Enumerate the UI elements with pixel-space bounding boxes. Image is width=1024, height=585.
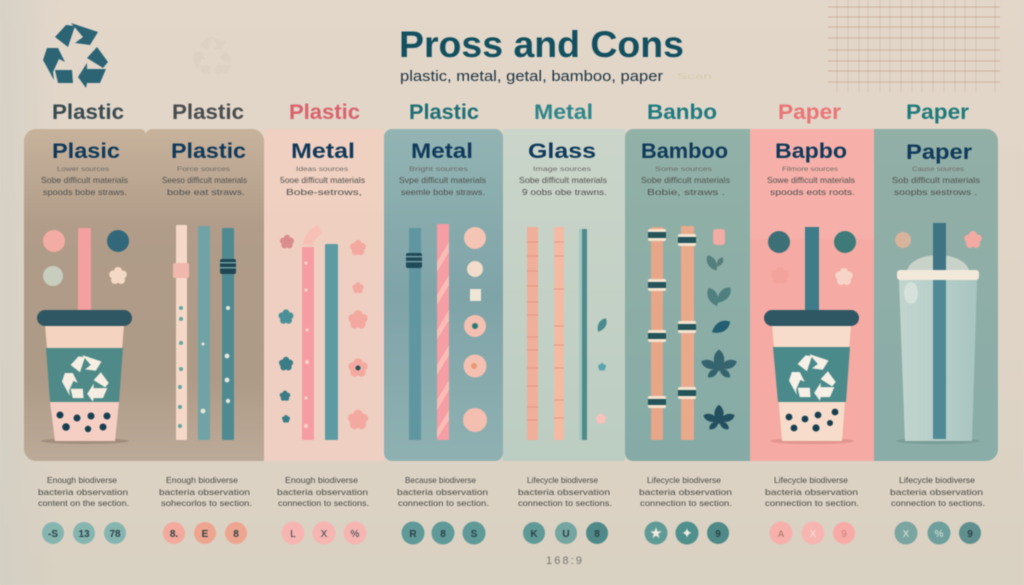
column labels: Plastic bbox=[172, 101, 244, 124]
panel: plasic bbox=[24, 129, 146, 461]
icon row: plastic two: 8. bbox=[170, 529, 178, 540]
panel: metal, teal: seemle bobe straws. bbox=[401, 187, 485, 197]
panel: metal, pale pink: Bobe-setrows, bbox=[286, 187, 362, 197]
straws: teal and striped pink bbox=[406, 224, 449, 440]
panel: glass: Sobe difficult materials bbox=[519, 175, 607, 185]
icons: blossoms bbox=[895, 231, 982, 248]
panel: bapbo, coral: Filmore sources bbox=[782, 166, 839, 173]
icon row: metal: % bbox=[351, 529, 360, 540]
subtitle: plastic, metal, getal, bamboo, paper bbox=[400, 68, 663, 85]
bottom text: metal bbox=[277, 475, 369, 508]
icon row: paper bbox=[894, 522, 981, 544]
panel: plasic: Sobe difficult materials bbox=[41, 175, 128, 185]
footer ratio label: 168:9 bbox=[546, 555, 582, 567]
column labels: Paper bbox=[906, 101, 969, 124]
panel: metal, pale pink: 5ooe difficult materials bbox=[280, 175, 365, 185]
icon row: plastic two bbox=[163, 522, 247, 544]
icon row: metal: L bbox=[290, 529, 296, 540]
panel: bapbo, coral: Bapbo bbox=[775, 140, 847, 163]
bottom text: metal: Enough biodiverse bbox=[285, 475, 358, 485]
icon row: bapbo: A bbox=[778, 529, 784, 539]
bottom text: paper: bacteria observation bbox=[890, 487, 983, 497]
icon row: metal: X bbox=[321, 529, 328, 540]
bottom text: bamboo bbox=[639, 475, 732, 508]
panel: plastic: Plastic bbox=[171, 140, 246, 163]
icon: clear plastic cup with straw bbox=[896, 223, 980, 444]
icon row: paper: X bbox=[903, 529, 910, 540]
panel: plasic: Lower sources bbox=[57, 166, 110, 173]
icon row: bamboo bbox=[644, 522, 729, 544]
icon row: metal two bbox=[402, 522, 486, 544]
straws: bamboo with node bands bbox=[648, 226, 696, 440]
panel: paper: soopbs sestrows . bbox=[894, 187, 977, 197]
icon: bubble tea cup with teal straw bbox=[764, 227, 859, 444]
column labels: Plastic bbox=[409, 101, 479, 124]
column labels: Plastic bbox=[52, 101, 124, 124]
bottom text: metal: bacteria observation bbox=[277, 487, 368, 497]
icon: recycling symbol bbox=[43, 23, 108, 88]
icon row: glass bbox=[523, 522, 608, 544]
column labels bbox=[52, 101, 969, 124]
bottom text: metal two: bacteria observation bbox=[397, 487, 488, 497]
column labels: Metal bbox=[534, 101, 593, 124]
bottom text: metal two bbox=[397, 475, 489, 508]
icon row: paper: 9 bbox=[967, 529, 973, 540]
faint label: Scan bbox=[677, 72, 712, 81]
panel: bapbo, coral: spoods eots roots. bbox=[770, 187, 855, 197]
bottom text: plastic: content on the section. bbox=[38, 498, 129, 508]
panel: glass bbox=[503, 129, 625, 461]
decorative grid top right bbox=[828, 0, 1000, 92]
bottom text: plastic two: sohecorlos to section. bbox=[161, 498, 252, 508]
bottom text: bapbo: Lifecycle biodiverse bbox=[774, 475, 848, 485]
panel: bamboo: Bobie, straws . bbox=[647, 187, 725, 197]
bottom text: plastic two bbox=[159, 475, 252, 508]
bottom text: metal: connection to sections. bbox=[278, 498, 369, 508]
bottom text: bamboo: Lifecycle biodiverse bbox=[647, 475, 721, 485]
icons: right florals bbox=[348, 240, 368, 429]
panel: metal, teal: Svpe difficult materials bbox=[399, 175, 486, 185]
panel: bamboo: Bamboo bbox=[641, 140, 728, 163]
panel: metal, pale pink: Metal bbox=[291, 140, 355, 163]
bottom text: glass bbox=[518, 475, 612, 508]
straws: peach and thin teal bbox=[527, 227, 587, 440]
panel: glass: Image sources bbox=[533, 166, 592, 173]
panel: glass: 9 oobs obe trawns. bbox=[522, 187, 607, 197]
icons: small leaves bbox=[595, 316, 609, 424]
bottom text: bamboo: connection to section. bbox=[640, 498, 732, 508]
icon: faint recycling watermark bbox=[192, 36, 232, 76]
bottom text: paper: connection to sections. bbox=[891, 498, 985, 508]
bottom text: bapbo: connection to section. bbox=[765, 498, 859, 508]
panel: plasic: spoods bobe straws. bbox=[43, 187, 127, 197]
panel: bapbo, coral: Sowe difficult materials bbox=[767, 175, 855, 185]
panel: bamboo bbox=[625, 129, 750, 461]
panel: plastic bbox=[146, 129, 264, 461]
panel: plastic: Seeso difficult materials bbox=[162, 175, 247, 185]
icon row: metal two: R bbox=[409, 529, 417, 540]
bottom text: glass: Lifecycle biodiverse bbox=[527, 475, 598, 485]
icon row: bamboo: ★ bbox=[649, 525, 663, 542]
bottom text: paper bbox=[890, 475, 985, 508]
icon row: bamboo: 9 bbox=[715, 529, 721, 540]
panel: metal, pale pink: Ideas sources bbox=[296, 166, 349, 173]
bottom text: bapbo bbox=[765, 475, 859, 508]
icons: blossoms bbox=[768, 231, 856, 285]
icon row: plastic two: E bbox=[202, 529, 209, 540]
panel: paper: Cause sources bbox=[912, 166, 965, 173]
icons: blossoms bbox=[43, 230, 129, 286]
bottom text: glass: connection to sections. bbox=[518, 498, 612, 508]
icon row: plastic bbox=[42, 522, 126, 544]
icon: bubble tea cup with pink straw bbox=[37, 228, 132, 444]
icon row: bapbo: 9 bbox=[841, 529, 847, 540]
icon row: glass: U bbox=[562, 529, 570, 540]
column labels: Banbo bbox=[647, 101, 717, 124]
panel: metal, pale pink bbox=[264, 129, 384, 461]
bottom text: bamboo: bacteria observation bbox=[639, 487, 732, 497]
bottom text: glass: bacteria observation bbox=[518, 487, 610, 497]
icons: round badges bbox=[463, 227, 487, 432]
bottom text: plastic bbox=[38, 475, 129, 508]
icon row: plastic: -S bbox=[48, 529, 58, 540]
icon row: glass: 8 bbox=[594, 529, 600, 540]
bottom text: plastic two: Enough biodiverse bbox=[166, 475, 238, 485]
panel: metal, teal bbox=[384, 129, 503, 461]
icons: left florals bbox=[279, 235, 294, 423]
icon row: metal bbox=[282, 522, 366, 544]
icon row: glass: K bbox=[530, 529, 538, 540]
straws: patterned cream, teal and blue bbox=[173, 225, 236, 440]
panel: metal, teal: Metal bbox=[411, 140, 473, 163]
panel: bapbo, coral bbox=[750, 129, 874, 461]
panel: paper: Paper bbox=[906, 141, 972, 164]
panel: glass: Glass bbox=[528, 140, 596, 163]
icons: bamboo leaves bbox=[700, 229, 738, 431]
icon row: paper: % bbox=[935, 529, 944, 540]
bottom text: metal two: Because biodiverse bbox=[405, 475, 476, 485]
bottom text: bapbo: bacteria observation bbox=[765, 487, 858, 497]
panel: bamboo: Some sources bbox=[655, 166, 713, 173]
panel: plastic: bobe eat straws. bbox=[167, 187, 245, 197]
bottom text: paper: Lifecycle biodiverse bbox=[899, 475, 975, 485]
icon row: metal two: S bbox=[471, 529, 478, 540]
icon row: bapbo: X bbox=[810, 529, 817, 540]
bottom text: metal two: connection to section. bbox=[398, 498, 489, 508]
panel: paper: Sob difficult materials bbox=[892, 175, 980, 185]
icon row: plastic: 13 bbox=[78, 529, 90, 540]
icon row: bamboo: ✦ bbox=[681, 525, 693, 541]
straws: bent pink and teal bbox=[304, 229, 338, 440]
panel: plastic: Force sources bbox=[177, 166, 231, 173]
icon row: plastic: 78 bbox=[109, 529, 121, 540]
bottom text: plastic two: bacteria observation bbox=[159, 487, 250, 497]
bottom text: plastic: bacteria observation bbox=[38, 487, 128, 497]
column labels: Paper bbox=[778, 101, 841, 124]
panel: metal, teal: Bright sources bbox=[409, 166, 469, 173]
panel: plasic: Plasic bbox=[52, 140, 120, 163]
panel: paper bbox=[874, 129, 998, 461]
bottom text: plastic: Enough biodiverse bbox=[47, 475, 117, 485]
icon row: bapbo bbox=[770, 522, 855, 544]
column labels: Plastic bbox=[289, 101, 360, 124]
title: Pross and Cons bbox=[399, 24, 684, 65]
panel: bamboo: Sobe difficult materials bbox=[641, 175, 730, 185]
icon row: metal two: 8 bbox=[440, 529, 446, 540]
icon row: plastic two: 8 bbox=[233, 529, 239, 540]
